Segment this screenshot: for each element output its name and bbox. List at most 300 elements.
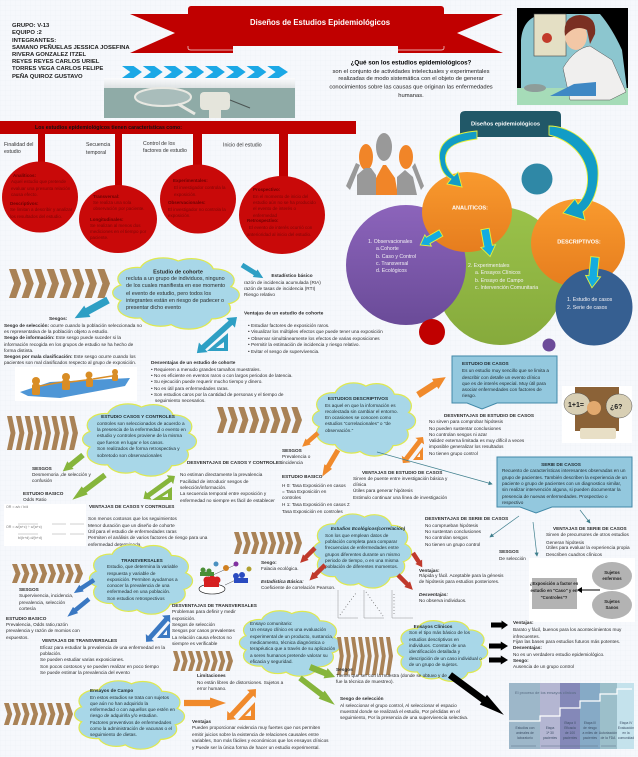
callout: serie de casos: sin realizar intervención alguna, si pueden documentar la (502, 487, 621, 492)
arrows: red (297, 545, 426, 593)
list: observacionales: b. Caso y Control (376, 254, 416, 260)
text: desventajas cohorte: • No es eficiente en eventos raros o con largos periodos de latencia. (151, 373, 293, 378)
text: ventajas ecologicos: Ventajas: (419, 568, 440, 573)
team info text: SAMANO PEÑUELAS JESSICA JOSEFINA (12, 44, 130, 51)
text: sesgos transversales: SESGOS (19, 587, 39, 592)
text: estadistica basica (261, 579, 335, 590)
text: ventajas cohorte: • Evitar el sesgo de supervivencia. (248, 349, 319, 354)
callout: serie de casos: respectivo (502, 500, 524, 505)
chart: clinical trials stairs: Etapa (546, 726, 554, 730)
cloud: ensayo comunitario: Un ensayo clínico es una evaluación (250, 627, 326, 632)
arrow: orange angled (223, 685, 260, 724)
image: math teacher: ¿6? (610, 404, 622, 411)
cloud: estudios ecologicos: población de diferentes momentos. (325, 564, 398, 569)
chart: clinical trials stairs: Estudios con (516, 726, 535, 730)
cloud: ensayo comunitario: medicamento, técnica diagnóstica o (250, 640, 325, 645)
arrow: curved to descriptivos (549, 126, 598, 220)
column heading: Control de los factores: factores de estudio (143, 148, 187, 154)
team info text: INTEGRANTES: (12, 38, 56, 44)
callout: estudio de casos (452, 356, 557, 409)
text: ventajas serie de casos: Describen cuadros clínicos (546, 552, 603, 557)
panel: control circle: Experimentales: (173, 178, 208, 183)
text: desventajas cohorte: • Requieren a menudo grandes tamaños muestrales. (151, 367, 261, 372)
text: limitaciones: No están libres de distorsiones. Sujetos a (197, 680, 284, 685)
panel: finalidad circle: Descriptivos: (10, 201, 39, 206)
panel: control circle: El investigador controla la (174, 185, 226, 190)
text: sesgo de seleccion: seguimiento, Por la presencia de una supervivencia selectiva. (340, 715, 468, 720)
experimentales circle (435, 207, 565, 345)
text: sesgos cohorte: ocurre cuando la población seleccionada no (50, 323, 142, 328)
text: ventajas ensayos clinicos: Sesgo: (513, 658, 529, 663)
text: desventajas casos y controles: enfermedad no siempre es fácil de establecer (180, 498, 275, 503)
text: ventajas casos y controles (88, 504, 208, 547)
stems (38, 134, 288, 186)
text: desventajas estudio de casos: No sirven para comprobar hipótesis (429, 419, 504, 424)
arrow: line to serie de casos (377, 452, 492, 484)
text: ventajas cohorte: • Observar simultáneamente los efectos de varias exposiciones (248, 336, 380, 341)
chart: clinical trials stairs: de la FDA (601, 736, 616, 740)
panel: big venn circles (346, 164, 632, 352)
text: desventajas cohorte: • Son estudios caros por la cantidad de personas y el tiempo de (151, 392, 284, 397)
observacionales circle (346, 205, 466, 325)
arrow: blue angled (142, 611, 174, 646)
text: estudio basico casos: ESTUDIO BASICO (23, 491, 64, 496)
text: estadistica basica: Estadística Básica: (261, 579, 304, 584)
text: sesgos comunitario (336, 667, 447, 684)
text: sesgos serie: De selección (499, 556, 526, 561)
cloud: ensayo comunitario (240, 611, 340, 676)
text: ventajas ensayos clinicos: Ausencia de un grupo control (513, 664, 574, 669)
cloud: transversales: enfermedad en una población. (107, 589, 170, 594)
cloud: cohorte: de los cuales manifiesta en ese momento (126, 283, 225, 289)
text: limitaciones (197, 673, 284, 691)
text: estudio basico descriptivos: ESTUDIO BASICO (282, 474, 323, 479)
cloud: ensayo comunitario: terapéutica que a través de su aplicación (250, 646, 336, 651)
text: sesgos serie: SESGOS (499, 549, 519, 554)
text: estudio basico descriptivos: = Tasa Exposición en (282, 489, 327, 494)
image: odds ratio formula: OR = a/(a+c) ÷ c/(a+c) (6, 525, 42, 529)
cloud: cohorte: recluta a un grupo de individuos, ninguno (126, 276, 225, 282)
chart: clinical trials stairs: Etapa IV (620, 721, 633, 725)
arrow: to observacionales (417, 227, 444, 251)
cloud: estudios ecologicos: frecuencias de enfermedades entre (325, 545, 399, 550)
diagram: exposure case control: Sanos (606, 605, 619, 610)
panel: secuencia circle (79, 185, 157, 253)
chart: clinical trials stairs (509, 683, 634, 749)
column heading: Secuencia temporal: Secuencia (86, 142, 110, 148)
cloud: casos y controles: controles son seleccionados de acuerdo a (97, 421, 185, 426)
text: sesgos transversales: cortesía (19, 606, 36, 611)
arrow: orange to estudio de casos (415, 372, 449, 400)
callout: estudio de casos: Es un estudio muy sencillo que se limita a (462, 368, 549, 373)
text: sesgo ecologico: Falacia ecológica. (261, 566, 299, 571)
cloud: ensayos clinicos: identificación detallada y (409, 649, 461, 654)
text: estudio basico descriptivos: Tasa Exposición en controles (282, 509, 343, 514)
chart: clinical trials stairs: pacientes (583, 736, 597, 740)
panel: inicio circle: anterioridad al inicio del estudio. (247, 232, 311, 237)
text: sesgo de seleccion: muestral donde se realizará el estudio, Por pérdidas en el (340, 709, 460, 714)
cloud: ensayo comunitario: a seres humanos pretende valorar su (250, 653, 328, 658)
cloud: ensayos de campo: como la administración de vacunas o el (90, 726, 172, 731)
list: experimentales: c. Intervención Comunitaria (475, 285, 538, 291)
text: desventajas transversales: Problemas para definir y medir (172, 609, 236, 614)
panel: finalidad circle: los resultados del estudio. (10, 214, 62, 219)
panel: secuencia circle: Se realiza una sola (93, 200, 132, 205)
arrow: to case types (584, 256, 602, 289)
text: ventajas serie de casos (546, 526, 630, 557)
image: odds ratio formula (4, 504, 86, 546)
list: observacionales: d. Ecológicos (376, 268, 407, 274)
text: ventajas ensayos clinicos: infrecuentes. (513, 634, 540, 639)
text: ventajas ensayos clinicos: Desventajas: (513, 645, 542, 650)
text: desventajas cohorte: seguimiento necesarios. (155, 398, 206, 403)
text: sesgos cohorte: forma distinta. (4, 348, 33, 353)
team info text: RIVERA GONZALEZ ITZEL (12, 52, 86, 58)
text: ventajas estudio de casos: Estimulo continuar una línea de investigación (353, 495, 447, 500)
text: desventajas estudio de casos (429, 413, 534, 456)
text: sesgos cohorte: Sesgos por mala clasificación: (4, 354, 74, 359)
team info text: REYES REYES CARLOS URIEL (12, 59, 100, 65)
cloud: casos y controles: ESTUDIO CASOS Y CONTROLES (101, 414, 175, 419)
analiticos circle (422, 172, 512, 252)
cloud: estudios descriptivos: observación." (325, 428, 354, 433)
diagram: exposure case control: estudio en "Caso" y en (530, 588, 578, 593)
list: experimentales: b. Ensayo de Campo (475, 278, 524, 284)
text: sesgos cohorte: Este sesgo ocurre cuando los (74, 354, 136, 359)
panel: inicio circle: el evento de interés o (253, 206, 297, 211)
text: desventajas casos y controles (180, 460, 282, 503)
text: desventajas cohorte: • No es útil para enfermedades raras. (151, 386, 229, 391)
text: desventajas transversales: La relación causa efectos no (172, 635, 232, 640)
text: ventajas transversales (40, 638, 165, 675)
panel: finalidad circle: Aquel estudio que pretende (11, 179, 67, 184)
text: desventajas serie de casos: DESVENTAJAS DE SERIE DE CASOS (425, 516, 508, 521)
text: desventajas estudio de casos: DESVENTAJAS DE ESTUDIO DE CASOS (444, 413, 534, 418)
text: ventajas serie de casos: Sirven de precursores de otros estudios (546, 532, 630, 537)
text: ventajas estudio de casos (353, 470, 448, 500)
team info text: TORRES VEGA CARLOS FELIPE (12, 66, 103, 72)
chart: clinical trials stairs: Evaluación (618, 726, 634, 730)
text: sesgos casos: Desmemoria ,de selección y (32, 472, 92, 477)
arrow: to experimentales (478, 228, 497, 258)
team info text: EQUIPO :2 (12, 30, 43, 36)
text: desventajas estudio de casos: No tienen grupo control (429, 451, 478, 456)
chevrons: descriptivos (217, 407, 302, 433)
text: ventajas casos y controles: Útil para el estudio de enfermedades raras (88, 528, 177, 534)
text: desventajas transversales: DESVENTAJAS DE TRANSVERSALES (172, 603, 257, 608)
text: desventajas ecologicos: Desventajas: (419, 592, 448, 597)
text: ventajas casos y controles: Permiten el análisis de varios factores de riesgo para una (88, 535, 208, 540)
text: sesgos transversales (19, 587, 73, 611)
panel: control circle (160, 164, 236, 234)
cloud: ensayo comunitario: experimental de un producto, sustancia, (250, 634, 333, 639)
text: sesgos comunitario: Tienen que ser con la muestra (donde se obtuvo y de (336, 673, 447, 678)
text: estadistico basico: Estadístico básico (271, 273, 313, 278)
cloud: ensayos de campo: riesgo de adquirirla y/o estudian. (90, 713, 158, 718)
cloud: ensayo comunitario: Ensayo comunitario: (250, 621, 292, 626)
text: sesgos transversales: prevalencia, selección (19, 600, 66, 605)
cloud: ensayos de campo: Factores preventivos de enfermedades (90, 720, 172, 725)
text: desventajas estudio de casos: Validez externa limitada es muy difícil a veces (429, 438, 525, 443)
text: sesgos cohorte: información recogida en los grupos de estudio se ha hecho de (4, 342, 134, 347)
chart: clinical trials stairs: 1ª 30 (546, 731, 554, 735)
text: limitaciones: Limitaciones (197, 673, 226, 678)
panel: secuencia circle: mediciones en el tiempo por (90, 229, 147, 234)
cloud: casos y controles: la presencia de la enfermedad o evento en (97, 427, 186, 432)
list: observacionales: c. Transversal (376, 261, 408, 267)
text: desventajas estudio de casos: No controlan sesgos ni azar (429, 432, 488, 437)
text: ventajas estudio de casos: VENTAJAS DE ESTUDIO DE CASOS (362, 470, 442, 475)
text: ventajas transversales: VENTAJAS DE TRANSVERSALES (42, 638, 117, 643)
text: ventajas transversales: Son pocos costosos y se pueden realizar en poco tiempo (40, 664, 159, 669)
cloud: transversales: TRANSVERSALES (121, 558, 163, 563)
cloud: casos y controles: Son realizados de forma retrospectiva y (97, 446, 180, 451)
text: desventajas estudio de casos: imposible generalizar los resultados (429, 444, 504, 449)
icon: people group (346, 133, 424, 195)
title: Diseños de Estudios Epidemiológicos (250, 18, 391, 27)
panel: finalidad circle (2, 162, 78, 232)
text: desventajas cohorte: Desventajas de un estudio de cohorte (151, 360, 236, 365)
small purple circle (542, 338, 556, 352)
text: ventajas serie de casos: Útiles para evaluar la experiencia propia (546, 544, 630, 550)
definition text: conocimientos sobre las causas que originan las enfermedades (329, 84, 493, 90)
image: odds ratio formula: OR = a/c / b/d (6, 505, 28, 509)
text: sesgo de seleccion: Al seleccionar el grupo control, Al seleccionar el espacio (340, 703, 457, 708)
text: ventajas ensayos de campo: Ventajas (192, 719, 211, 724)
panel: control circle: Observacionales: (168, 200, 206, 205)
text: sesgos descriptivos: incidencia (282, 460, 303, 465)
text: ventajas casos y controles: enfermedad determinada (88, 542, 141, 547)
text: ventajas estudio de casos: clínica (353, 482, 367, 487)
text: sesgos comunitario: Sesgos (336, 667, 353, 672)
column heading: Finalidad del estudio: estudio (4, 149, 21, 155)
panel: secuencia circle: paciente. (90, 235, 108, 240)
text: sesgos cohorte: es representativa de la población objeto a estudio. (4, 329, 108, 334)
text: ventajas ensayos de campo (192, 719, 329, 750)
descriptivos circle (531, 199, 625, 287)
panel: control circle: exposición. (168, 213, 191, 218)
cloud: ensayos clinicos: individuos. Constan de una (409, 643, 466, 648)
cloud: estudios ecologicos: población completa para comparar (325, 539, 398, 544)
text: estudio basico transversales (6, 616, 80, 640)
diagram: exposure case control: enfermos (602, 576, 622, 581)
cloud: estudios descriptivos: ESTUDIOS DESCRIPTIVOS (328, 396, 388, 401)
cloud: ensayos de campo: En estos estudios se trata con sujetos (90, 695, 170, 700)
text: estadistico basico: razón de incidencia acumulada (RIA) (244, 280, 321, 285)
panel: inicio circle: El evento de interés ocurrió con (249, 225, 313, 230)
text: estudio basico transversales: prevalencia y razón de momios con (6, 628, 80, 633)
chart: clinical trials stairs: Etapa III (584, 721, 596, 725)
panel: inicio circle: enfermedad (253, 213, 278, 218)
text: ventajas estudio de casos: Sirven de puente entre investigación básica y (353, 476, 448, 481)
text: ventajas ecologicos (419, 568, 504, 584)
text: ventajas cohorte: • Permitir la estimación de incidencia y riesgo relativo. (248, 342, 360, 347)
text: desventajas transversales: siempre es verificable (172, 641, 218, 646)
text: ventajas ensayos clinicos (513, 620, 622, 669)
text: estudio basico descriptivos: H 1: Tasa Exposición en casos ≠ (282, 502, 350, 507)
text: sesgos transversales: Supervivencia, incidencia, (19, 593, 73, 598)
image: people on puzzle (15, 367, 137, 401)
cloud: ensayos clinicos (398, 621, 487, 681)
arrow: blue angled (193, 312, 241, 358)
callout: estudio de casos: asociar enfermedades con factores de (462, 387, 542, 392)
team info text: GRUPO: V-13 (12, 23, 50, 29)
text: ventajas estudio de casos: Útiles para generar hipótesis (353, 487, 413, 493)
text: estudio basico descriptivos: controles (282, 495, 302, 500)
cloud: transversales: respuesta y variable de (107, 571, 156, 576)
text: desventajas ecologicos (419, 592, 466, 603)
cloud: transversales: exposición. Permiten ayudarnos a (107, 577, 178, 582)
text: desventajas cohorte: • Su ejecución puede requerir mucho tiempo y dinero. (151, 379, 263, 384)
icon: blue chevrons (122, 66, 288, 78)
arrow: to estadistico (240, 261, 266, 282)
text: estudio basico descriptivos (282, 474, 350, 514)
image: odds ratio formula: b/(b+d) d/(b+d) (18, 536, 42, 540)
cloud: transversales (90, 545, 192, 614)
chevrons: casos y controles (7, 416, 78, 450)
text: sesgo ecologico: Sesgo: (261, 560, 277, 565)
panel: finalidad circle: causa efecto. (11, 192, 38, 197)
question heading: ¿Qué son los estudios epidemiológicos? (351, 60, 472, 67)
list: descriptive studies: 1. Estudio de casos (567, 297, 613, 303)
definition text: son el conjunto de actividades intelectuales y experimentales (333, 69, 490, 75)
title ribbon (130, 6, 503, 53)
chart: clinical trials stairs: Eficacia (564, 726, 576, 730)
text: desventajas transversales: Sesgos de selección (172, 622, 215, 627)
cloud: ensayos clinicos: estudios descriptivos en (409, 637, 459, 642)
small teal circle (522, 164, 552, 194)
text: ventajas cohorte: Ventajas de un estudio de cohorte (244, 310, 324, 316)
chart: clinical trials stairs: Autorización (599, 731, 617, 735)
text: desventajas serie de casos: No controlan sesgos (425, 535, 468, 540)
case types circle (556, 268, 632, 346)
chart: clinical trials stairs: en la (622, 731, 630, 735)
box: Diseños epidemiológicos (460, 111, 561, 137)
arrow: curved to analiticos (439, 131, 477, 187)
panel: finalidad circle: evaluar una presunta relación (11, 186, 71, 191)
chart: clinical trials stairs: comunidad (618, 736, 634, 740)
text: estudio basico descriptivos: H 0: Tasa Exposición en casos (282, 483, 346, 488)
cloud: transversales: Son estudios retrospectivos (107, 596, 165, 601)
cloud: cohorte: integrantes están en riesgo de padecer o (126, 298, 224, 304)
chart: clinical trials stairs: El proceso de los ensayos clínicos (515, 690, 576, 695)
diagram: exposure case control (529, 558, 635, 622)
team info text: PEÑA QUIROZ GUSTAVO (12, 73, 83, 80)
cloud: ensayos clinicos: descripción de un caso individual o (409, 656, 482, 661)
cloud: estudios descriptivos (313, 384, 415, 456)
text: limitaciones: error humano. (197, 686, 226, 691)
definition text: realizadas de modo sistemática con el objeto de generar (338, 76, 484, 82)
text: ventajas casos y controles: Menor duración que un diseño de cohorte (88, 523, 175, 528)
arrow: orange to sesgos (300, 430, 321, 450)
chevrons: ensayos de campo (4, 703, 73, 725)
cloud: casos y controles: que fueron en lugar e los casos. (97, 440, 164, 445)
cloud: estudios ecologicos: grupos diferentes durante un mismo (325, 552, 400, 557)
cloud: ensayos de campo: seguimiento de dietas. (90, 732, 137, 737)
panel: control circle: exposición. (174, 192, 197, 197)
text: sesgos cohorte: pacientes son mal clasificados respecto al grupo de exposición. (4, 360, 136, 365)
list: observacionales: 1. Observacionales (368, 239, 413, 245)
text: estudio basico transversales: expuestos. (6, 635, 29, 640)
chevrons: transversales (12, 564, 83, 583)
definition text: humanas. (398, 93, 424, 99)
panel: finalidad circle: Analíticos: (13, 173, 37, 178)
text: desventajas transversales (172, 603, 257, 646)
chart: clinical trials stairs: animales de (516, 731, 534, 735)
text: ventajas ensayos de campo: emitir juicios sobre la existencia de relaciones causales entre (192, 732, 319, 737)
chart: clinical trials stairs: Etapa II (564, 721, 576, 725)
text: estadistico basico: Riesgo relativo (244, 292, 275, 297)
cloud: casos y controles: sobretodo son observacionales (97, 453, 163, 458)
text: ventajas serie de casos: Generan hipótesis (546, 540, 585, 545)
cloud: estudios descriptivos: En ocasiones se conocen como (325, 415, 392, 420)
text: sesgos cohorte: Sesgo de información: (4, 335, 56, 340)
text: ventajas cohorte: • Estudiar factores de exposición raros. (248, 323, 329, 328)
cloud: cohorte: Estudio de cohorte (153, 269, 203, 275)
text: estadistico basico: razón de tasas de incidencia (RTI) (244, 286, 316, 291)
cloud: estudios ecologicos: periodo de tiempo, o en una misma (325, 558, 399, 563)
cloud: transversales: Estudio, que determina la variable (107, 564, 178, 569)
panel: secuencia circle: Se realizan al menos dos (90, 223, 141, 228)
callout: serie de casos: SERIE DE CASOS (541, 462, 581, 467)
cloud: estudios descriptivos: recolectada sin cambiar el entorno. (325, 409, 398, 414)
text: ventajas ecologicos: de hipótesis para estudios posteriores. (419, 579, 499, 584)
red header bar (0, 121, 356, 134)
text: desventajas serie de casos: No tienen un grupo control (425, 542, 480, 547)
arrow: green to sesgos (60, 451, 86, 475)
chevrons: limitaciones (173, 651, 233, 671)
text: ventajas casos y controles: Son menos costosos que los seguimientos (88, 516, 178, 521)
cloud: ensayos clinicos: de un grupo de sujetos. (409, 662, 458, 667)
column heading: Control de los factores: Control de los (143, 141, 175, 147)
chart: clinical trials stairs: pacientes (563, 736, 577, 740)
text: desventajas ecologicos: No observa individuos. (419, 598, 466, 603)
text: sesgos serie (499, 549, 526, 561)
text: sesgo de seleccion (340, 696, 468, 720)
cloud: estudios ecologicos (314, 515, 411, 587)
text: ventajas cohorte: • Visualizar los múltiples efectos que puede tener una exposición (248, 329, 383, 334)
cloud: ensayos de campo: Ensayos de Campo (90, 688, 133, 693)
text: sesgos descriptivos (282, 448, 311, 465)
diagram: exposure case control: "Controles"? (541, 595, 568, 600)
chart: scatter plots (338, 590, 413, 618)
image: math teacher: 1+1= (568, 402, 584, 409)
cloud: cohorte: el evento de estudio, pero todos los (126, 291, 211, 297)
arrows: blue (65, 577, 96, 620)
image: network of people (199, 562, 252, 594)
callout: serie de casos: grupo de pacientes. También describen la experiencia de un (502, 475, 627, 480)
text: desventajas casos y controles: DESVENTAJAS DE CASOS Y CONTROLES (187, 460, 282, 465)
arrow: orange to estudio basico (318, 448, 342, 479)
callout: serie de casos: presencia de nuevas enfermedades. Prospectivo o (502, 494, 608, 499)
panel: inicio circle: Retrospectivo: (247, 218, 279, 223)
list: experimentales: 2. Experimentales (468, 263, 510, 269)
text: desventajas cohorte (151, 360, 293, 403)
text: sesgo de seleccion: Sesgo de selección (340, 696, 384, 701)
arrows: green to sesgos (297, 662, 338, 709)
text: ventajas ecologicos: Rápida y fácil. Aceptable para la génesis (419, 573, 504, 578)
cloud: ensayos de campo: que aún no han adquirido la (90, 701, 149, 706)
cloud: ensayo comunitario: eficacia y seguridad. (250, 659, 293, 664)
text: ventajas ensayos de campo: Pueden proporcionar evidencia muy fuertes que nos permiten (192, 725, 321, 730)
arrows: black (446, 620, 508, 720)
cloud: ensayos de campo: enfermedad o con aquellos que estén en (90, 707, 175, 712)
text: ventajas ensayos de campo: variables, Son más fáciles y económicos que los ensayos clínicos (192, 738, 329, 743)
panel: inicio circle (239, 176, 325, 254)
text: ventajas ensayos clinicos: No es un verdadero estudio epidemiológico. (513, 652, 604, 657)
callout: estudio de casos: ESTUDIO DE CASOS (462, 361, 509, 366)
text: ventajas transversales: Eficaz para estudiar la prevalencia de una enfermedad en la (40, 645, 165, 650)
